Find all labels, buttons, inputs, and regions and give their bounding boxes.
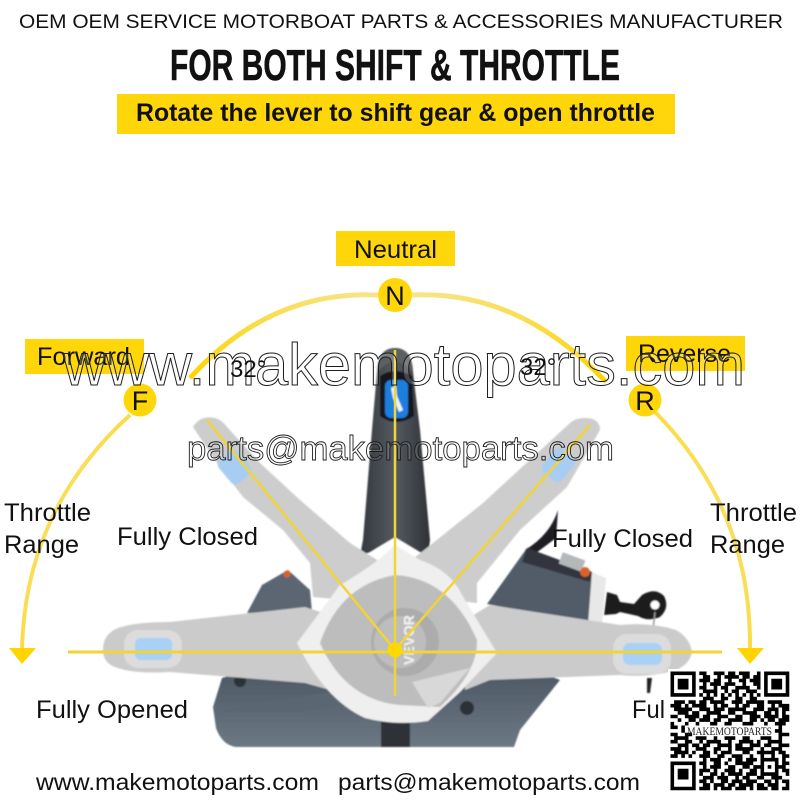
footer website: www.makemotoparts.com <box>35 769 319 795</box>
angle label: left 32 degrees: 32° <box>230 356 266 383</box>
label: forward <box>25 339 144 374</box>
marker: F <box>124 384 156 416</box>
right throttle range label: Range <box>710 531 785 559</box>
marker: N: N <box>385 281 405 311</box>
rear housing left <box>247 570 312 613</box>
label: reverse: Reverse <box>638 340 731 368</box>
marker: R: R <box>635 386 655 416</box>
label: neutral <box>336 231 455 266</box>
marker: F: F <box>132 386 148 416</box>
label: fully opened left: Fully Opened <box>36 696 188 724</box>
subtitle banner: Rotate the lever to shift gear & open throttle <box>136 99 655 127</box>
right throttle range label <box>710 499 797 559</box>
label: fully closed right: Fully Closed <box>552 525 693 553</box>
pivot dot <box>388 642 402 658</box>
right throttle range label: Throttle <box>710 499 797 527</box>
rear housing right <box>487 510 606 626</box>
arc: neutral to forward <box>190 295 378 378</box>
small pin under right lever <box>647 678 652 693</box>
subtitle banner <box>117 94 675 134</box>
right horizontal lever ghost <box>465 605 692 690</box>
left throttle range label <box>4 499 91 559</box>
left throttle range label: Throttle <box>4 499 91 527</box>
arrow: right throttle range <box>655 412 764 664</box>
arc: neutral to reverse <box>412 295 606 382</box>
label: fully closed left: Fully Closed <box>117 523 258 551</box>
marker: N <box>378 278 412 312</box>
label: neutral: Neutral <box>354 236 437 264</box>
left forward lever ghost <box>193 417 385 600</box>
watermark: email: parts@makemotoparts.com <box>187 430 614 468</box>
label: reverse <box>626 336 745 371</box>
brand mark: VEVOR <box>401 615 418 665</box>
watermark: website: www.makemotoparts.com <box>62 331 745 398</box>
QR code: MAKEMOTOPARTS <box>687 726 772 738</box>
label: forward: Forward <box>37 343 130 371</box>
footer email: parts@makemotoparts.com <box>338 769 640 795</box>
yellow position guide lines <box>68 350 722 696</box>
ignition key <box>604 591 666 630</box>
center lever in neutral position <box>360 348 430 556</box>
central hub <box>297 545 497 723</box>
throttle control unit <box>103 348 692 747</box>
QR code <box>668 669 793 794</box>
left horizontal lever ghost <box>103 607 330 690</box>
left throttle range label: Range <box>4 531 79 559</box>
label: fully opened right, partly hidden: Ful <box>632 696 665 724</box>
marker: R <box>628 384 662 416</box>
right reverse lever ghost <box>405 418 600 603</box>
angle label: right 32 degrees: 32° <box>520 354 556 381</box>
lower housing <box>213 672 560 747</box>
arrow: left throttle range <box>9 415 130 664</box>
page header text: OEM OEM SERVICE MOTORBOAT PARTS & ACCESSORIES MANUFACTURER <box>19 11 783 33</box>
